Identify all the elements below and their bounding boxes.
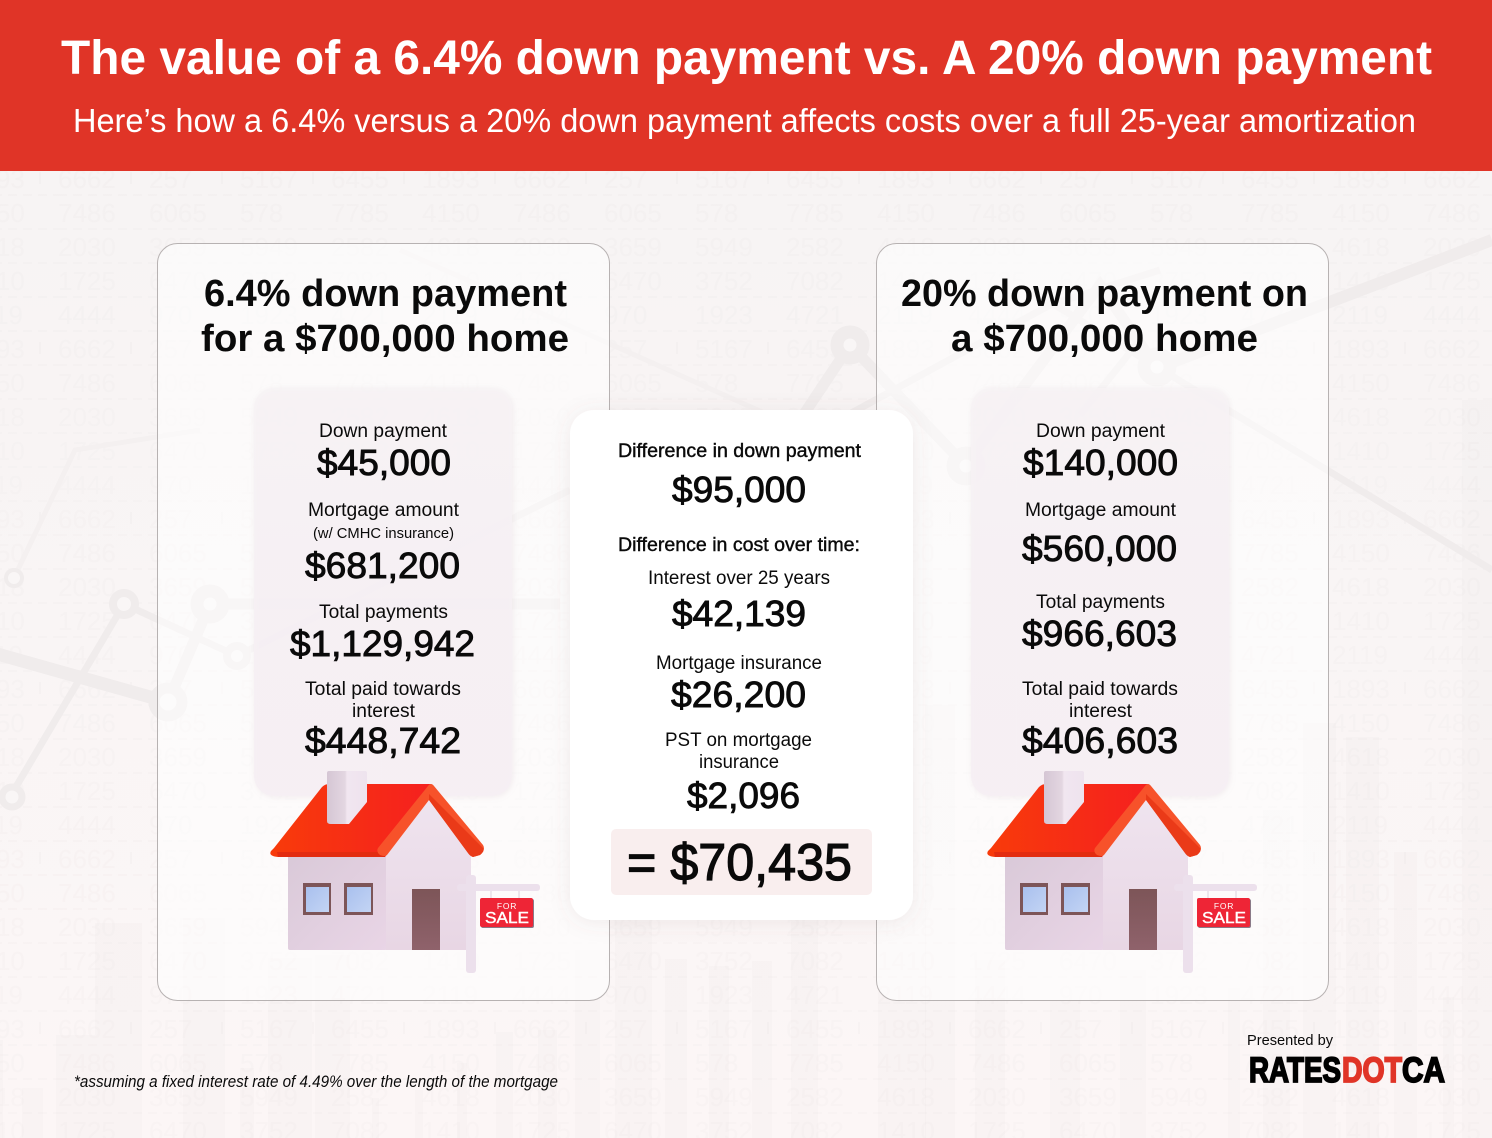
panel heading: [901, 273, 1308, 360]
icon: house with for sale sign: [987, 771, 1257, 973]
figures card: (w/ CMHC insurance): [313, 525, 454, 542]
total callout: = $70,435: [627, 834, 852, 892]
figures card: interest: [352, 701, 416, 722]
figures card: $45,000: [317, 442, 451, 483]
panel: difference summary: $26,200: [671, 674, 806, 715]
figures card: $140,000: [1023, 442, 1178, 483]
figures card: [971, 388, 1229, 796]
figures card: Down payment: [319, 421, 448, 442]
panel: difference summary: $2,096: [687, 775, 800, 816]
panel heading: 20% down payment on: [901, 273, 1308, 315]
figures card: Total paid towards: [1022, 679, 1178, 700]
panel: 20% down payment: [876, 244, 1328, 1000]
figures card: [254, 388, 512, 796]
figures card: Total payments: [319, 602, 448, 623]
figures card: $1,129,942: [290, 623, 475, 664]
figures card: $966,603: [1022, 613, 1177, 654]
figures card: Total payments: [1036, 592, 1165, 613]
figures card: $406,603: [1022, 720, 1178, 761]
panel: difference summary: PST on mortgage: [665, 730, 812, 751]
panel: difference summary: [570, 410, 913, 920]
panel heading: [201, 273, 569, 360]
figures card: Mortgage amount: [308, 500, 460, 521]
icon: house with for sale sign: SALE: [1202, 910, 1246, 927]
presented by logo: CA: [1402, 1051, 1445, 1090]
figures card: Mortgage amount: [1025, 500, 1177, 521]
panel: difference summary: Interest over 25 years: [648, 568, 830, 589]
figures card: $560,000: [1022, 528, 1177, 569]
presented by logo: Presented by: [1247, 1032, 1333, 1049]
footnote: *assuming a fixed interest rate of 4.49% over the length of the mortgage: [74, 1072, 558, 1091]
panel: difference summary: $42,139: [672, 593, 806, 634]
header banner: [0, 0, 1492, 171]
figures card: $448,742: [305, 720, 461, 761]
icon: house with for sale sign: SALE: [485, 910, 529, 927]
icon: house with for sale sign: [270, 771, 540, 973]
panel: 6.4% down payment: [158, 244, 610, 1000]
panel heading: a $700,000 home: [951, 318, 1258, 360]
panel: difference summary: Difference in down payment: [618, 441, 862, 462]
figures card: Total paid towards: [305, 679, 461, 700]
panel: difference summary: $95,000: [672, 469, 806, 510]
title: The value of a 6.4% down payment vs. A 20% down payment: [61, 32, 1432, 85]
panel heading: for a $700,000 home: [201, 318, 569, 360]
panel: difference summary: insurance: [699, 752, 779, 773]
figures card: Down payment: [1036, 421, 1166, 442]
presented by logo: DOT: [1342, 1051, 1402, 1090]
subtitle: Here’s how a 6.4% versus a 20% down payment affects costs over a full 25-year amortization: [73, 102, 1416, 139]
panel heading: 6.4% down payment: [204, 273, 567, 315]
figures card: $681,200: [305, 545, 460, 586]
icon: house with for sale sign: FOR: [497, 901, 517, 911]
icon: house with for sale sign: FOR: [1214, 901, 1234, 911]
presented by logo: RATES: [1249, 1051, 1341, 1090]
panel: difference summary: Mortgage insurance: [656, 653, 822, 674]
figures card: interest: [1069, 701, 1133, 722]
panel: difference summary: Difference in cost over time:: [618, 535, 860, 556]
presented by logo: [1247, 1032, 1445, 1090]
